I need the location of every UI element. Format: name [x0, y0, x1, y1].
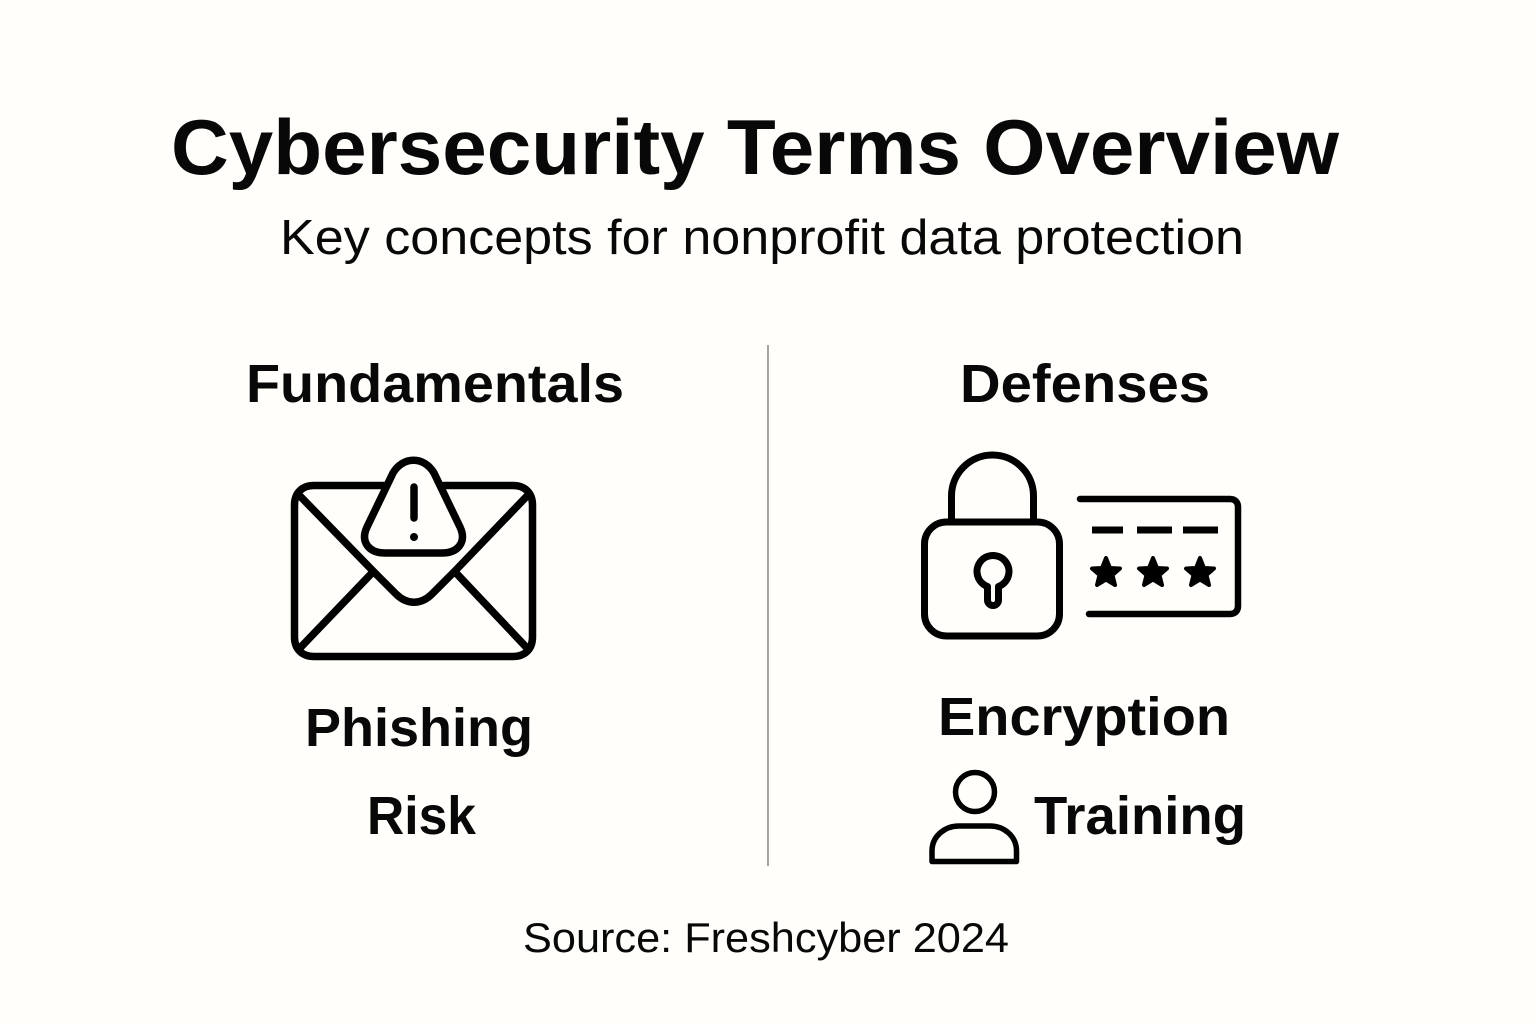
icon: password card — [1080, 499, 1238, 614]
label: encryption: Encryption — [938, 687, 1230, 747]
source note: Source: Freshcyber 2024 — [523, 914, 1009, 961]
label: training: Training — [1034, 786, 1246, 846]
panel: defenses — [924, 354, 1246, 862]
title: Cybersecurity Terms Overview — [171, 103, 1339, 191]
icon: envelope with warning triangle — [294, 460, 532, 656]
heading: defenses: Defenses — [960, 354, 1210, 414]
label: phishing: Phishing — [305, 698, 533, 758]
icon: person — [932, 772, 1016, 862]
icon: padlock — [924, 455, 1060, 636]
heading: fundamentals: Fundamentals — [246, 354, 624, 414]
subtitle: Key concepts for nonprofit data protection — [280, 211, 1244, 265]
panel: fundamentals — [246, 354, 624, 846]
divider between columns — [767, 345, 769, 866]
label: risk: Risk — [367, 786, 477, 846]
